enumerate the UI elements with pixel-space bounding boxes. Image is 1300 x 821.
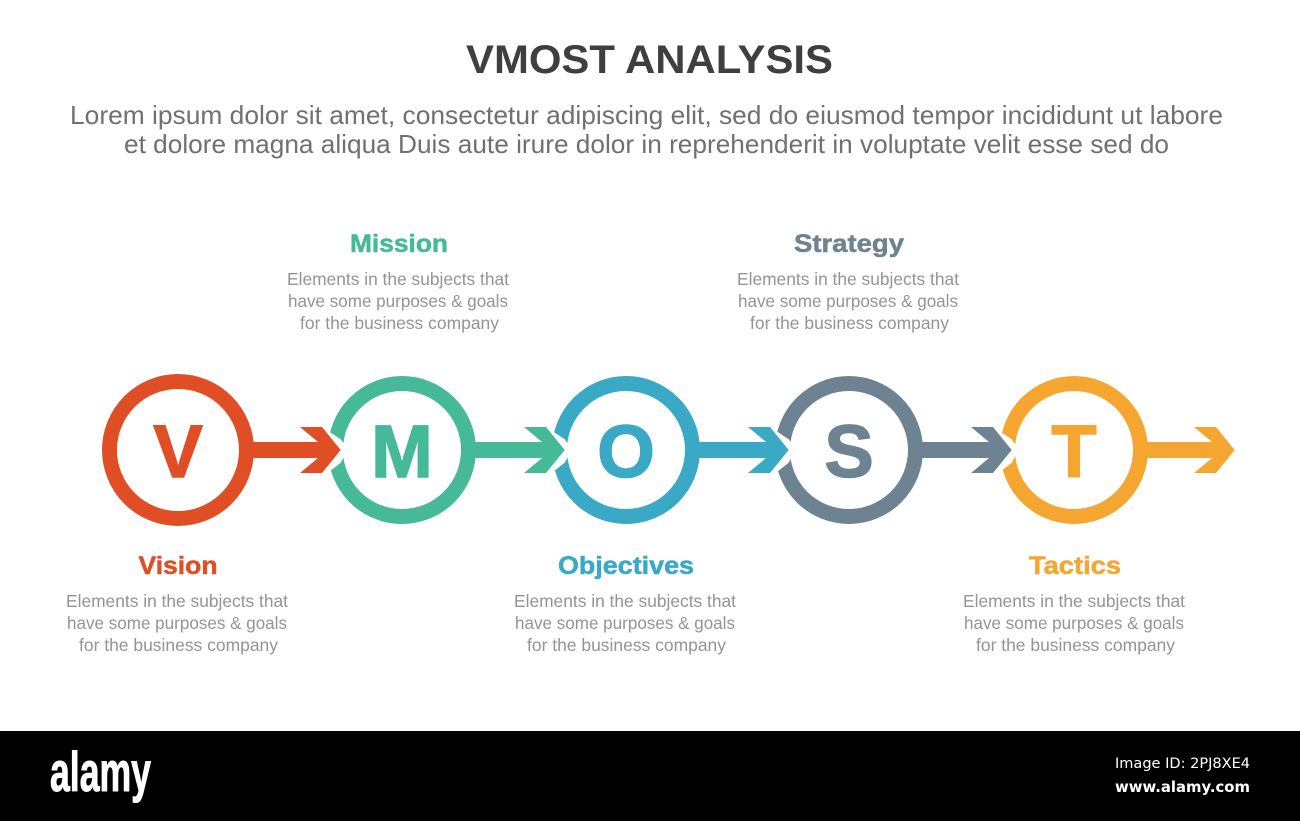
panel: vision text: Elements in the subjects that bbox=[66, 591, 288, 611]
panel: tactics text: Tactics bbox=[1029, 552, 1121, 580]
step S: arrow and ring: S bbox=[824, 410, 874, 493]
subtitle text block: et dolore magna aliqua Duis aute irure dolor in reprehenderit in voluptate velit esse sed do bbox=[124, 129, 1169, 159]
step O: arrow and ring bbox=[560, 384, 796, 516]
panel: tactics text: Elements in the subjects that bbox=[963, 591, 1185, 611]
step M: arrow and ring: M bbox=[371, 410, 433, 493]
panel: mission text bbox=[287, 230, 509, 333]
panel: tactics text bbox=[963, 552, 1185, 655]
website url: www.alamy.com bbox=[1115, 778, 1250, 796]
panel: mission text: have some purposes & goals bbox=[288, 291, 508, 311]
step V: arrow and ring bbox=[110, 382, 348, 518]
panel: objectives text: Elements in the subjects that bbox=[514, 591, 736, 611]
footer bar bbox=[0, 731, 1300, 821]
panel: vision text: for the business company bbox=[79, 635, 278, 655]
panel: vision text: have some purposes & goals bbox=[67, 613, 287, 633]
step T: arrow and ring bbox=[1008, 384, 1235, 516]
step O: arrow and ring: O bbox=[597, 410, 655, 493]
step S: arrow and ring bbox=[782, 384, 1019, 516]
panel: mission text: Elements in the subjects that bbox=[287, 269, 509, 289]
panel: tactics text: for the business company bbox=[976, 635, 1175, 655]
step M: arrow and ring bbox=[336, 384, 572, 516]
panel: strategy text: have some purposes & goals bbox=[738, 291, 958, 311]
alamy logo: alamy bbox=[50, 740, 151, 803]
panel: strategy text bbox=[737, 230, 959, 333]
title: VMOST ANALYSIS bbox=[466, 38, 833, 82]
panel: mission text: Mission bbox=[350, 230, 448, 258]
panel: strategy text: Strategy bbox=[794, 230, 904, 258]
subtitle text block bbox=[70, 100, 1223, 159]
panel: objectives text bbox=[514, 552, 736, 655]
panel: strategy text: Elements in the subjects that bbox=[737, 269, 959, 289]
panel: objectives text: for the business company bbox=[527, 635, 726, 655]
step T: arrow and ring: T bbox=[1051, 410, 1097, 493]
panel: tactics text: have some purposes & goals bbox=[964, 613, 1184, 633]
panel: strategy text: for the business company bbox=[750, 313, 949, 333]
subtitle text block: Lorem ipsum dolor sit amet, consectetur adipiscing elit, sed do eiusmod tempor incididunt ut labore bbox=[70, 100, 1223, 130]
image id: Image ID: 2PJ8XE4 bbox=[1115, 756, 1250, 772]
panel: objectives text: have some purposes & goals bbox=[515, 613, 735, 633]
panel: objectives text: Objectives bbox=[558, 552, 694, 580]
step V: arrow and ring: V bbox=[153, 410, 203, 493]
panel: mission text: for the business company bbox=[300, 313, 499, 333]
panel: vision text bbox=[66, 552, 288, 655]
panel: vision text: Vision bbox=[138, 552, 218, 580]
